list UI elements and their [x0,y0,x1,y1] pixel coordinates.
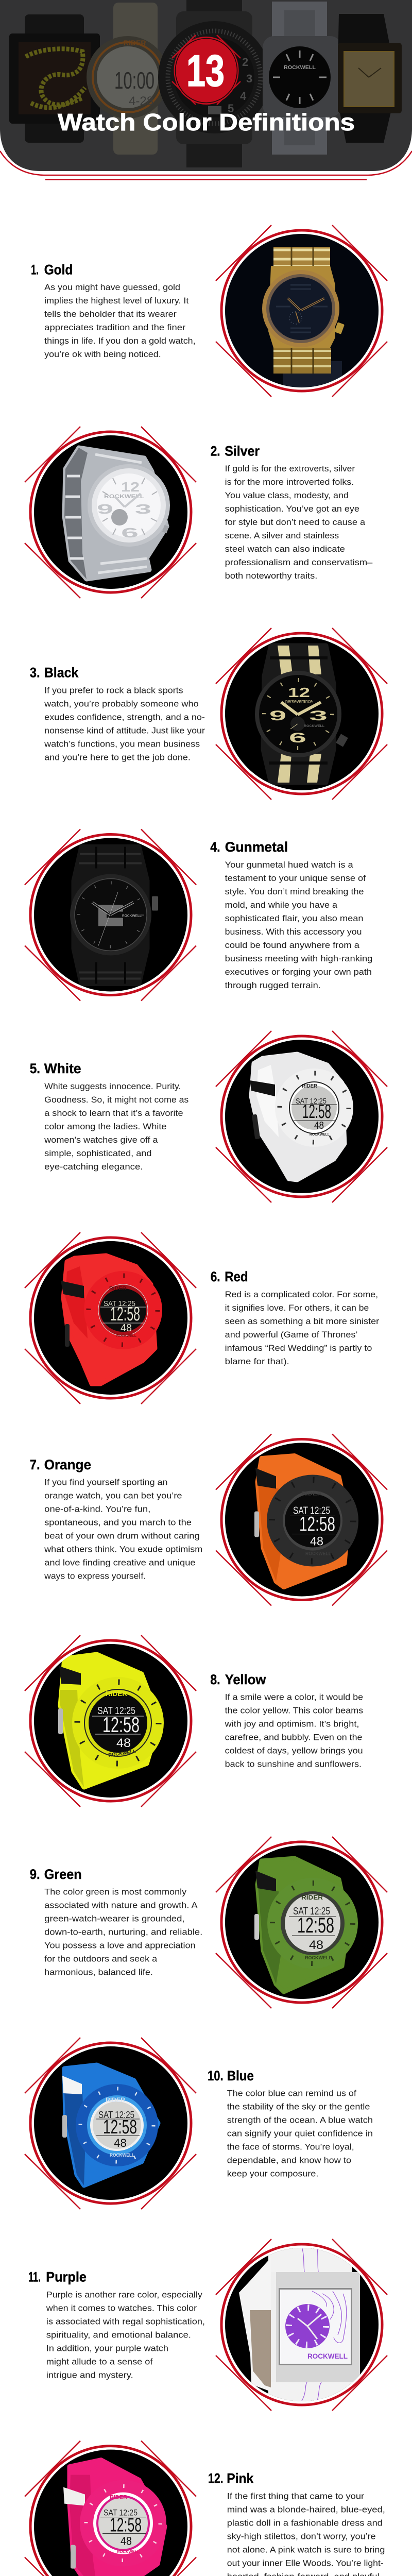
header watches photo: RIDER [124,39,146,47]
text: blue description: strength of the ocean. A blue watch [227,2115,373,2125]
text: yellow description: the color yellow. This color beams [225,1706,363,1716]
text: gunmetal description: testament to your unique sense of [225,874,366,883]
text: red description: it signifies love. For others, it can be [225,1303,369,1313]
heading: 7. Orange: Orange [44,1457,91,1472]
panel: red [25,1232,380,1404]
icon: yellow watch in ring: 12:58 [102,1713,140,1737]
text: black description: exudes confidence, strength, and a no- [44,713,205,722]
text: gunmetal description: mold, and while you have a [225,901,338,910]
icon: blue watch in ring: RIDER [106,2096,125,2104]
icon: red watch in ring: 12:58 [110,1303,140,1325]
heading: 10. Blue [208,2068,254,2083]
icon: black watch in ring: perseverance [285,699,313,705]
icon: black watch in ring: 6 [289,730,306,745]
text: orange description: ways to express yourself. [44,1572,146,1581]
text: gunmetal description: through rugged terrain. [225,981,321,990]
icon: pink watch in ring: SAT 12:25 [104,2508,138,2518]
icon: black watch in ring: 12 [288,685,310,700]
icon: white watch in ring: 12:58 [302,1101,331,1123]
text: green description: harmonious, balanced life. [44,1968,153,1977]
header watches photo: 3 [246,72,252,85]
text: silver description: sophistication. You’ve got an eye [225,504,359,514]
text: green description [44,1888,202,1977]
text: blue description [227,2089,373,2178]
icon: pink watch in ring: 12:58 [110,2515,142,2536]
icon: green watch in ring: ROCKWELL [305,1955,332,1960]
icon: pink watch in ring: 48 [121,2535,132,2548]
text: silver description: steel watch can also indicate [225,545,345,554]
icon: orange watch in ring: 48 [310,1534,323,1549]
title: Watch Color Definitions [58,109,355,135]
text: pink description: not alone. A pink watch is sure to bring [227,2545,385,2554]
header watches photo: 5 [228,102,234,115]
heading: 6. Red: Red [225,1269,248,1284]
text: red description [225,1290,380,1366]
text: orange description: If you find yourself sporting an [44,1478,168,1487]
heading: 3. Black: 3. [30,665,40,680]
icon: pink watch in ring: RIDER [110,2495,127,2501]
icon: silver watch in ring: 6 [121,525,139,540]
heading: 9. Green [30,1867,82,1882]
text: yellow description: carefree, and bubbly. Even on the [225,1733,363,1742]
text: yellow description: with joy and optimism. It’s bright, [225,1720,359,1729]
text: purple description: is associated with regal sophistication, [46,2317,205,2327]
heading: 1. Gold: 1. [31,262,39,278]
panel: gold [31,225,387,397]
icon: red watch in ring: SAT 12:25 [104,1299,135,1308]
text: gunmetal description: style. You don’t mind breaking the [225,887,364,896]
heading: 6. Red: 6. [211,1269,220,1284]
text: white description: Goodness. So, it might not come as [44,1095,188,1105]
heading: 2. Silver [211,444,260,459]
header watches photo: 10:00 [114,67,154,94]
panel: orange [30,1434,387,1605]
icon: silver watch in ring [25,427,196,598]
text: red description: infamous “Red Wedding” is partly to [225,1344,372,1353]
text: red description: blame for that). [225,1357,289,1366]
header banner [0,0,412,171]
icon: white watch in ring [216,1031,387,1202]
icon: white watch in ring: SAT 12:25 [296,1097,327,1106]
text: silver description: professionalism and conservatism– [225,558,373,567]
header red outline and bar [0,151,412,180]
heading: 1. Gold [31,262,73,278]
text: purple description: might allude to a sense of [46,2358,153,2367]
icon: blue watch in ring: ROCKWELL [110,2153,134,2158]
text: green description: associated with nature and growth. A [44,1901,198,1910]
text: gunmetal description: executives or forging your own path [225,968,372,977]
text: pink description [227,2492,385,2576]
heading: 11. Purple: Purple [46,2269,87,2285]
panel: yellow [25,1635,363,1807]
icon: yellow watch in ring: RIDER [106,1690,128,1698]
icon: red watch in ring: RIDER [109,1286,127,1292]
icon: yellow watch in ring: SAT 12:25 [97,1705,135,1717]
icon: silver watch in ring: 12 [121,479,140,495]
heading: 10. Blue: Blue [227,2068,254,2083]
icon: yellow watch in ring [25,1635,196,1807]
text: pink description: If the first thing that came to your [227,2492,365,2501]
text: silver description: You value class, modesty, and [225,491,349,500]
icon: red watch in ring: 48 [121,1323,132,1334]
icon: green watch in ring: 48 [309,1938,323,1952]
text: red description: Red is a complicated color. For some, [225,1290,378,1299]
icon: black watch in ring: 9 [269,708,286,723]
text: black description [44,686,205,762]
icon: silver watch in ring: ROCKWELL [104,494,144,500]
text: yellow description [225,1693,363,1769]
heading: 12. Pink: 12. [208,2470,224,2486]
text: white description: women's watches give off a [44,1136,158,1145]
text: gunmetal description: could be found anywhere from a [225,941,360,950]
text: orange description [44,1478,202,1581]
header watches photo: ROCKWELL [284,65,316,71]
text: gold description: things in life. If you don a gold watch, [44,336,196,346]
heading: 11. Purple: 11. [28,2269,41,2285]
text: white description [44,1082,188,1172]
icon: silver watch in ring: 9 [97,501,113,517]
text: white description: a shock to learn that it’s a favorite [44,1109,183,1118]
text: orange description: orange watch, you can bet you’re [44,1492,182,1501]
text: silver description: scene. A silver and stainless [225,531,339,540]
heading: 2. Silver: Silver [225,444,260,459]
text: gold description: implies the highest level of luxury. It [44,296,189,306]
text: gunmetal description: Your gunmetal hued watch is a [225,860,354,870]
icon: blue watch in ring: SAT 12:25 [98,2110,134,2120]
icon: blue watch in ring: 48 [114,2137,127,2149]
text: green description: green-watch-wearer is grounded, [44,1914,185,1924]
text: pink description: sky-high stilettos, don’t worry, you’re [227,2532,376,2541]
text: pink description: out your inner Elle Woods. You’re light- [227,2558,384,2568]
heading: 8. Yellow: 8. [210,1672,220,1687]
heading: 11. Purple [28,2269,87,2285]
icon: white watch in ring: RIDER [302,1083,318,1089]
text: pink description: plastic doll in a fashionable dress and [227,2518,383,2528]
text: black description: watch, you’re probably someone who [44,699,199,708]
text: purple description: In addition, your purple watch [46,2344,168,2353]
icon: black watch in ring: 3 [309,708,328,723]
text: silver description: both noteworthy traits. [225,571,317,581]
icon: yellow watch in ring: ROCKWELL [108,1749,136,1758]
text: gold description [44,283,196,359]
text: gunmetal description: business. With this accessory you [225,927,362,937]
text: orange description: what others think. You exude optimism [44,1545,202,1554]
heading: 6. Red [211,1269,248,1284]
heading: 4. Gunmetal: 4. [210,839,220,855]
text: black description: nonsense kind of attitude. Just like your [44,726,205,735]
text: silver description: If gold is for the extroverts, silver [225,464,355,473]
text: green description: The color green is most commonly [44,1888,187,1897]
text: yellow description: back to sunshine and sunflowers. [225,1760,362,1769]
icon: gold watch in ring [216,225,387,397]
text: gunmetal description: business meeting with high-ranking [225,954,372,963]
heading: 5. White: 5. [30,1061,40,1076]
heading: 12. Pink: Pink [227,2470,254,2486]
panel: blue [25,2038,373,2209]
icon: orange watch in ring [216,1434,387,1605]
text: blue description: keep your composure. [227,2169,318,2178]
text: purple description: spirituality, and emotional balance. [46,2331,191,2340]
text: black description: and you’re here to get the job done. [44,753,191,762]
heading: 5. White: White [44,1061,81,1076]
panel: green [30,1837,387,2008]
badge: number 13: 13 [186,46,225,96]
panel: white [30,1031,387,1202]
icon: white watch in ring: ROCKWELL [310,1133,330,1137]
icon: red watch in ring: ROCKWELL [116,1334,137,1338]
text: green description: You possess a love and appreciation [44,1941,196,1951]
text: black description: If you prefer to rock a black sports [44,686,183,695]
icon: gunmetal watch in ring: ROCKWELL [122,915,142,918]
icon: pink watch in ring: ROCKWELL [117,2550,140,2554]
icon: green watch in ring: 12:58 [297,1913,334,1937]
text: gold description: As you might have guessed, gold [44,283,180,292]
text: purple description: intrigue and mystery. [46,2371,133,2380]
text: silver description: for style but don’t need to cause a [225,518,366,527]
icon: green watch in ring: RIDER [301,1894,323,1901]
text: white description: White suggests innocence. Purity. [44,1082,181,1091]
text: gunmetal description: sophisticated flair, you also mean [225,914,364,923]
icon: orange watch in ring: 12:58 [299,1513,335,1535]
text: green description: down-to-earth, nurturing, and reliable. [44,1928,202,1937]
icon: silver watch in ring: 3 [135,501,151,517]
heading: 12. Pink [208,2470,254,2486]
text: red description: seen as something a bit more sinister [225,1317,380,1326]
heading: 4. Gunmetal: Gunmetal [225,839,288,855]
text: blue description: can signify your quiet confidence in [227,2129,373,2138]
text: orange description: spontaneous, and you march to the [44,1518,192,1528]
heading: 3. Black [30,665,79,680]
text: gold description: appreciates tradition and the finer [44,323,186,332]
heading: 9. Green: Green [44,1867,82,1882]
heading: 2. Silver: 2. [211,444,220,459]
icon: pink watch in ring [25,2441,196,2576]
text: orange description: and love finding creative and unique [44,1558,196,1568]
text: silver description: is for the more introverted folks. [225,478,354,487]
panel: gunmetal [25,829,372,1001]
icon: purple watch in ring: ROCKWELL [307,2352,348,2360]
icon: yellow watch in ring: 48 [116,1736,131,1750]
icon: black watch in ring: ROCKWELL [304,725,324,728]
text: pink description: mind was a blonde-haired, blue-eyed, [227,2505,385,2514]
text: white description: eye-catching elegance. [44,1162,143,1172]
text: green description: for the outdoors and seek a [44,1955,158,1964]
text: yellow description: If a smile were a color, it would be [225,1693,363,1702]
text: gold description: you’re ok with being noticed. [44,350,161,359]
icon: black watch in ring [216,628,387,800]
text: gunmetal description [225,860,372,990]
icon: gunmetal watch in ring [25,829,196,1001]
icon: orange watch in ring: ROCKWELL [305,1551,331,1556]
icon: green watch in ring: SAT 12:25 [293,1906,330,1917]
text: blue description: the stability of the sky or the gentle [227,2102,370,2111]
icon: blue watch in ring: 12:58 [103,2116,137,2138]
icon: green watch in ring [216,1837,387,2008]
icon: red watch in ring [25,1232,196,1404]
text: black description: watch’s functions, you mean business [44,739,200,749]
heading: 9. Green: 9. [30,1867,40,1882]
panel: silver [25,427,373,598]
text: white description: simple, sophisticated, and [44,1149,151,1158]
icon: orange watch in ring: RIDER [301,1491,322,1497]
text: purple description: Purple is another rare color, especially [46,2291,203,2300]
header watches photo [9,0,402,167]
heading: 3. Black: Black [44,665,79,680]
heading: 10. Blue: 10. [208,2068,224,2083]
text: red description: and powerful (Game of Thrones’ [225,1330,357,1340]
header watches photo: 4-28 [129,94,153,108]
text: gold description: tells the beholder that its wearer [44,310,177,319]
text: orange description: beat of your own drum without caring [44,1532,200,1541]
text: purple description [46,2291,205,2380]
badge: number 13 [172,35,241,105]
text: blue description: dependable, and know how to [227,2156,351,2165]
header watches photo: 2 [242,56,248,69]
icon: blue watch in ring [25,2038,196,2209]
heading: 8. Yellow: Yellow [225,1672,266,1687]
panel: black [30,628,387,800]
heading: 1. Gold: Gold [44,262,73,278]
panel: pink [25,2441,385,2576]
heading: 7. Orange: 7. [30,1457,40,1472]
text: silver description [225,464,373,581]
text: yellow description: coldest of days, yellow brings you [225,1747,363,1756]
icon: white watch in ring: 48 [314,1120,324,1131]
text: white description: color among the ladies. White [44,1122,166,1131]
panel: purple [28,2239,387,2411]
text: blue description: the face of storms. You’re loyal, [227,2142,354,2151]
text: orange description: one-of-a-kind. You’re fun, [44,1505,150,1514]
text: blue description: The color blue can remind us of [227,2089,356,2098]
text: purple description: when it comes to watches. This color [46,2304,197,2313]
icon: purple watch in ring [216,2239,387,2411]
header watches photo: 4 [240,90,247,103]
icon: orange watch in ring: SAT 12:25 [293,1505,330,1517]
